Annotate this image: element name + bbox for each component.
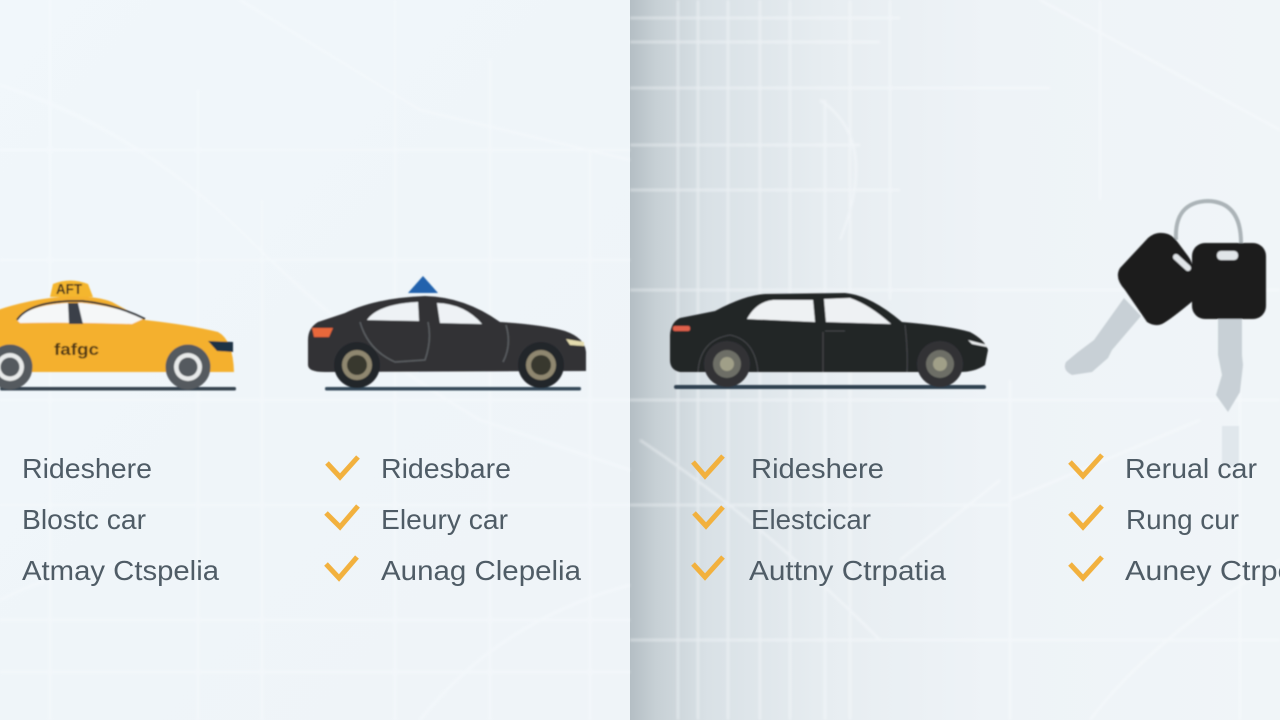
label: Rideshere (22, 453, 152, 484)
label: Atmay Ctspelia (22, 555, 219, 586)
left key blade (1065, 298, 1141, 375)
label: Rerual car (1125, 453, 1257, 484)
car body (308, 296, 586, 372)
headlight (566, 339, 584, 346)
key reflection (1222, 426, 1239, 466)
map pattern: left (0, 0, 630, 720)
label: Elestcicar (751, 504, 871, 535)
door pillar (68, 303, 83, 324)
headlight (208, 341, 233, 352)
right fob hole (1217, 251, 1238, 260)
windows (17, 303, 145, 324)
car: black limousine sedan (670, 293, 988, 389)
door lines (698, 325, 907, 372)
label: Rung cur (1126, 504, 1239, 535)
blue roof marker (408, 276, 438, 293)
label: Rideshere (751, 453, 884, 484)
wheels (704, 341, 963, 387)
car body (670, 293, 988, 372)
label: Eleury car (381, 504, 508, 535)
check icons (326, 457, 358, 578)
ground shadow (325, 387, 581, 390)
wheels (0, 344, 210, 390)
door lines (360, 322, 508, 362)
left key fob (1118, 233, 1194, 325)
side lettering: fafgc (54, 340, 99, 359)
label: Aunag Clepelia (381, 555, 581, 586)
check icons (693, 456, 723, 577)
car: yellow taxi (0, 280, 236, 390)
panel: left background (0, 0, 630, 720)
right key blade (1216, 315, 1243, 412)
windows (747, 300, 815, 322)
list: column 4 (1070, 453, 1280, 586)
map pattern: right (630, 0, 1280, 720)
left fob hole (1176, 257, 1188, 268)
wheels (334, 342, 564, 388)
right key fob (1192, 243, 1266, 319)
tail light (312, 328, 333, 337)
ground shadow (674, 385, 986, 389)
car body (0, 297, 234, 372)
check icons (1070, 455, 1102, 578)
list: column 3 (693, 453, 946, 586)
panel: right background (630, 0, 1280, 720)
ground shadow (0, 387, 236, 390)
windows (367, 302, 419, 321)
label: Ridesbare (381, 453, 511, 484)
list: column 2 (326, 453, 581, 586)
tail light (673, 326, 690, 331)
label: Auttny Ctrpatia (749, 555, 946, 586)
icon: car keys (1065, 201, 1266, 466)
car: yellow taxi: AFT (56, 281, 82, 298)
list: column 1 (22, 453, 219, 586)
car: black sedan with blue marker (308, 276, 586, 390)
key ring (1176, 201, 1241, 243)
label: Blostc car (22, 504, 146, 535)
window top trim (17, 301, 145, 320)
roof sign (50, 280, 93, 297)
headlight (968, 340, 987, 347)
